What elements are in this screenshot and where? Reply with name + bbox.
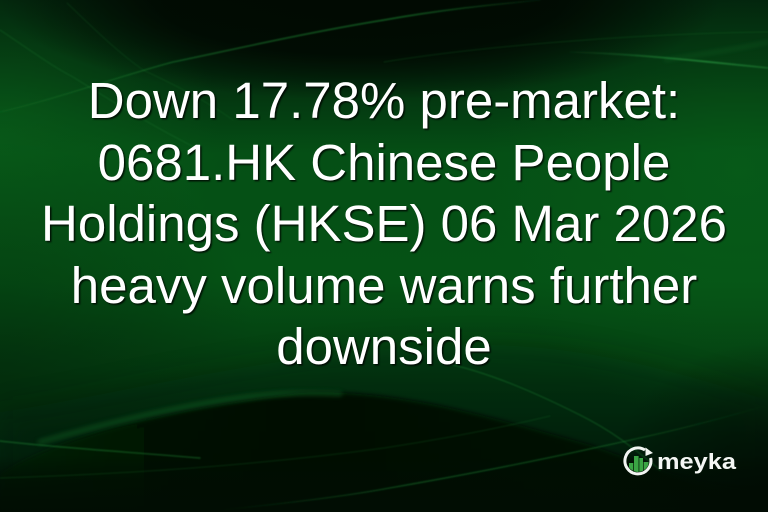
title: Down 17.78% pre-market:	[88, 72, 680, 129]
lower wave band	[0, 345, 768, 512]
title: 0681.HK Chinese People	[98, 134, 670, 191]
title	[41, 72, 727, 375]
title: Holdings (HKSE) 06 Mar 2026	[41, 195, 727, 252]
title: downside	[276, 318, 492, 375]
icon: ring with bars	[625, 448, 653, 474]
title: heavy volume warns further	[71, 257, 697, 314]
wordmark: meyka	[657, 449, 737, 474]
top dark sweep	[0, 0, 768, 110]
bottom dark hill	[0, 392, 768, 512]
logo: meyka	[623, 446, 737, 476]
